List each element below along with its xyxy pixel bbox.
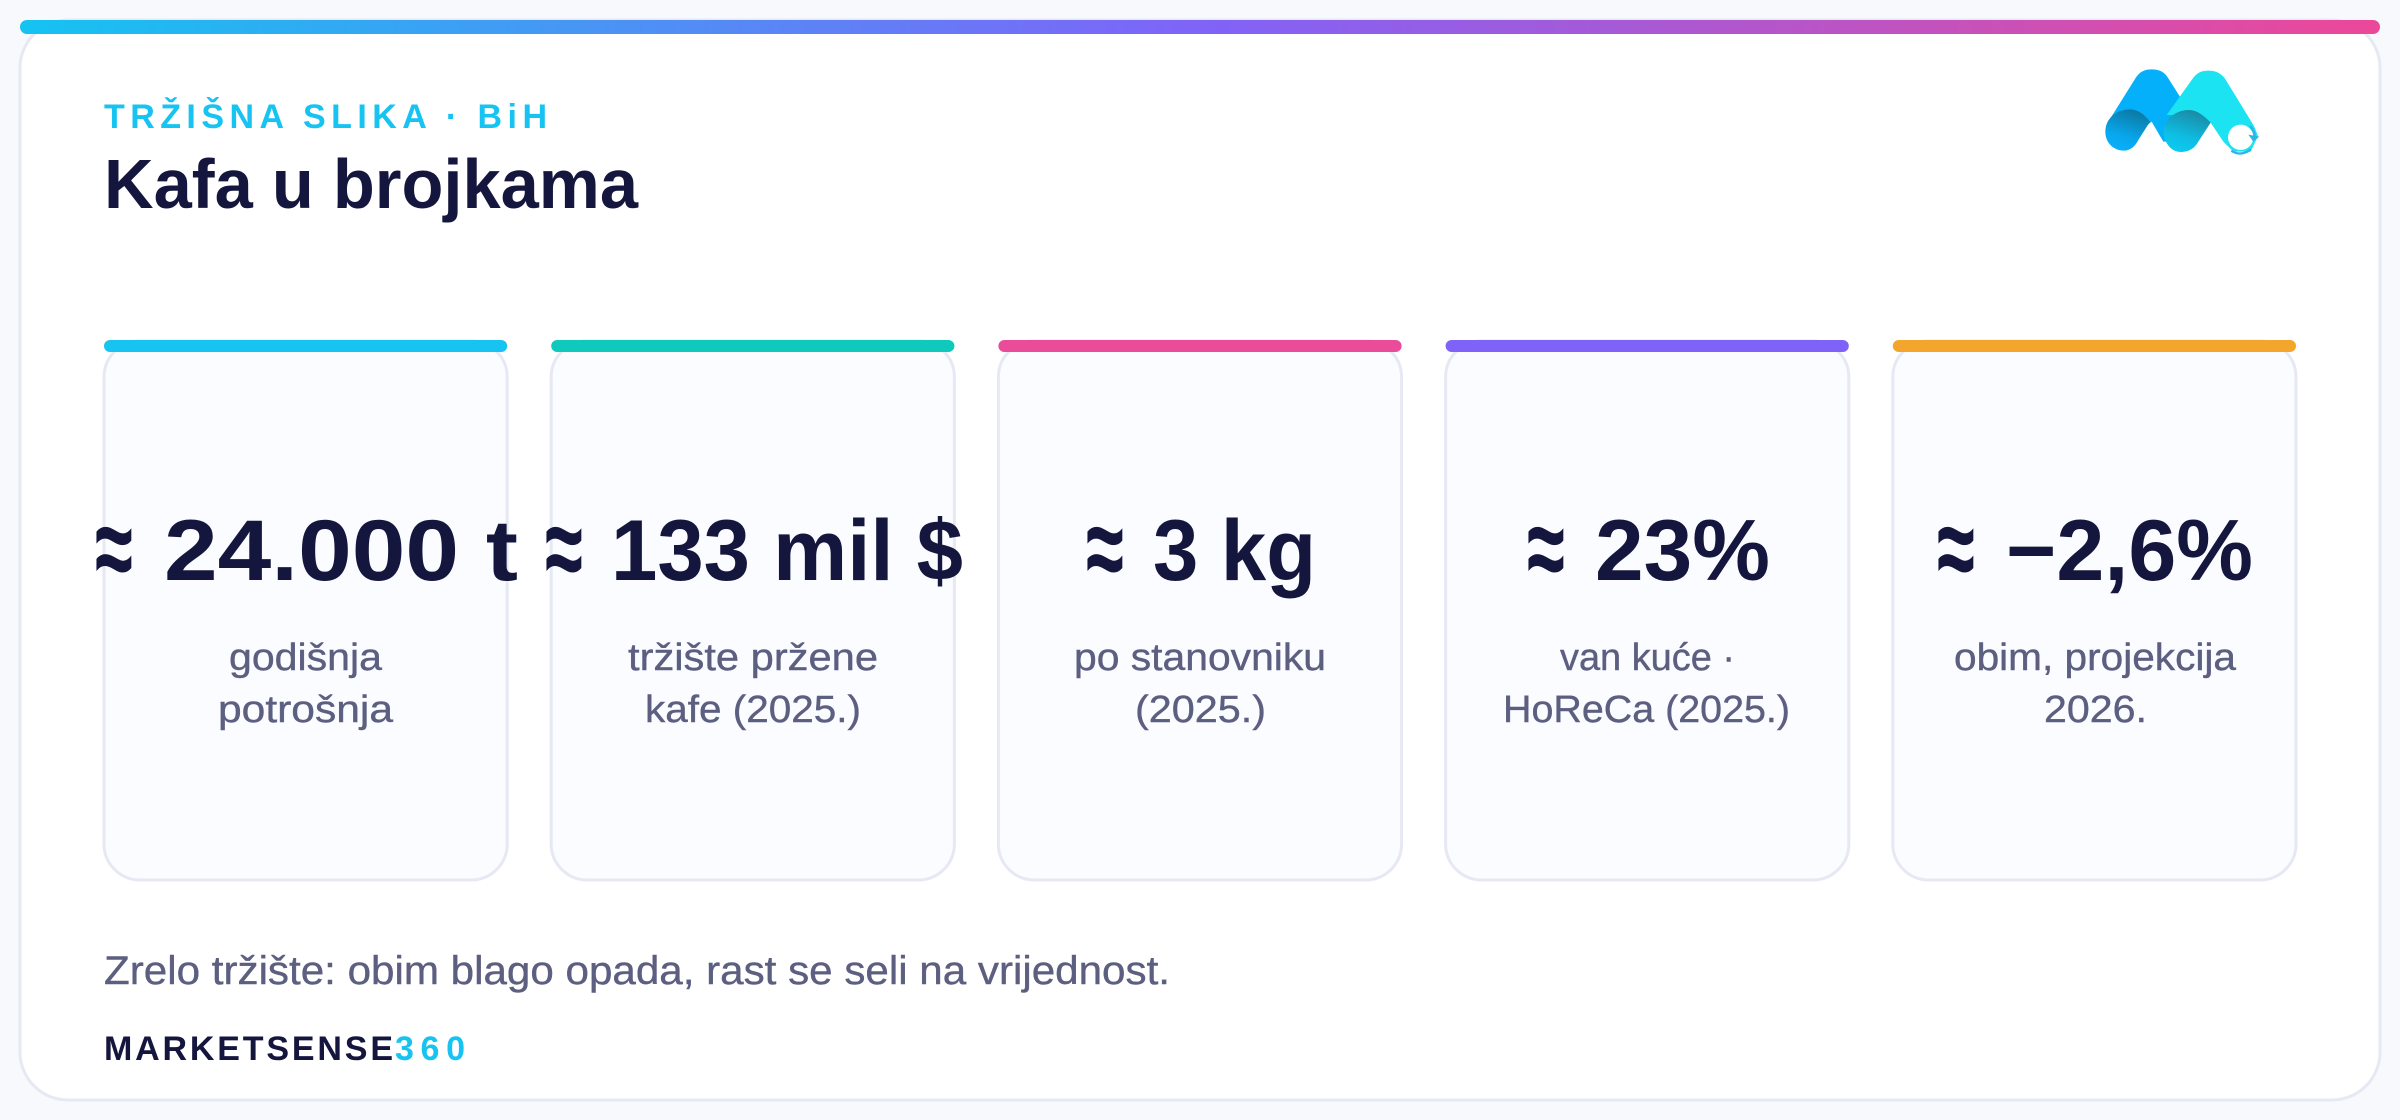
label: roasted coffee market: kafe (2025.): [645, 689, 861, 731]
label: per capita: (2025.): [1135, 689, 1266, 731]
label: roasted coffee market: [628, 637, 878, 731]
panel: per capita: [998, 340, 1402, 880]
label: annual consumption: [218, 637, 394, 731]
brand wordmark: 360: [395, 1030, 465, 1068]
eyebrow label: TRŽIŠNA SLIKA · BiH: [104, 97, 547, 136]
label: annual consumption: godišnja: [229, 637, 383, 679]
label: HoReCa share: van kuće ·: [1560, 637, 1735, 679]
accent bar: pink: [998, 340, 1402, 352]
approx sign: ≈: [95, 484, 133, 613]
panel: HoReCa share: [1446, 340, 1849, 880]
accent bar: violet: [1446, 340, 1849, 352]
value: 133 mil $: 133 mil $: [611, 503, 963, 599]
value: -2,6%: −2,6%: [2006, 503, 2253, 599]
approx sign: ≈: [545, 484, 583, 613]
panel: roasted coffee market: [545, 340, 963, 880]
panel: volume projection: [1893, 340, 2296, 880]
label: volume projection: obim, projekcija: [1954, 637, 2237, 679]
brand wordmark: MARKETSENSE: [104, 1030, 393, 1068]
label: volume projection: 2026.: [2044, 689, 2147, 731]
label: per capita: [1074, 637, 1326, 731]
approx sign: ≈: [1086, 484, 1124, 613]
icon: brand logo: [2105, 69, 2259, 153]
title: Kafa u brojkama: [104, 145, 639, 223]
top gradient bar: [20, 20, 2380, 34]
accent bar: cyan: [104, 340, 507, 352]
takeaway note: Zrelo tržište: obim blago opada, rast se seli na vrijednost.: [104, 949, 1170, 993]
value: 23%: 23%: [1595, 503, 1770, 599]
accent bar: orange: [1893, 340, 2296, 352]
panel: annual consumption: [95, 340, 518, 880]
value: 3 kg: 3 kg: [1153, 503, 1316, 599]
accent bar: teal: [551, 340, 954, 352]
label: per capita: po stanovniku: [1074, 637, 1326, 679]
approx sign: ≈: [1527, 484, 1565, 613]
label: annual consumption: potrošnja: [218, 689, 394, 731]
label: HoReCa share: [1503, 637, 1790, 731]
label: roasted coffee market: tržište pržene: [628, 637, 878, 679]
label: volume projection: [1954, 637, 2237, 731]
label: HoReCa share: HoReCa (2025.): [1503, 689, 1790, 731]
value: 24.000 t: 24.000 t: [164, 503, 518, 599]
approx sign: ≈: [1937, 484, 1975, 613]
